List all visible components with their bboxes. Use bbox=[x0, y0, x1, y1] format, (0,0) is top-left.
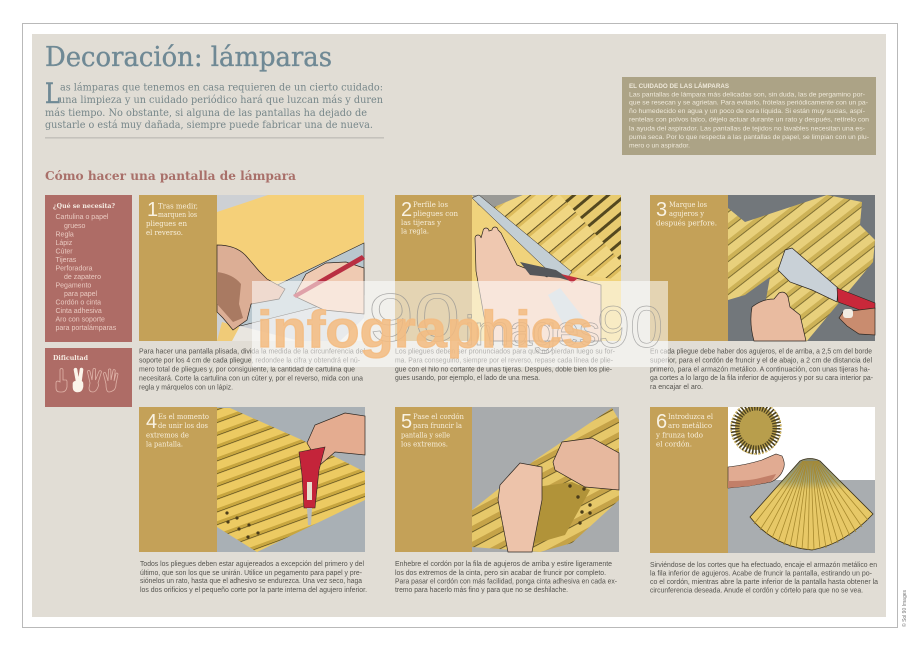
step 6 label panel: aro metálico bbox=[668, 421, 713, 430]
step 1 text: mero total de pliegues y, por consiguiente, la cantidad de cartulina que bbox=[139, 366, 355, 374]
callout: care of lamps: que se resecan y se agrietan. Para evitarlo, frótelas periódicamente con un pa- bbox=[629, 100, 868, 107]
step 6 text: la fila inferior de agujeros. Acabe de fruncir la pantalla, estirando un po- bbox=[650, 570, 873, 578]
step 4 label panel: Es el momento bbox=[158, 412, 209, 421]
section heading: Cómo hacer una pantalla de lámpara bbox=[45, 168, 296, 183]
step 4 bbox=[139, 407, 367, 594]
icon: four finger hand bbox=[103, 369, 118, 392]
panel: materials: Tijeras bbox=[56, 257, 77, 264]
step 1 text: Para hacer una pantalla plisada, divida la medida de la circunferencia del bbox=[139, 348, 365, 356]
step 2 text: ma. Para conseguirlo, siempre por el reverso, repase cada línea de plie- bbox=[395, 358, 614, 364]
step 1 label panel bbox=[139, 195, 217, 341]
title: Decoración: lámparas bbox=[45, 42, 332, 73]
step 2 bbox=[395, 195, 621, 382]
step 5 text: Enhebre el cordón por la fila de agujeros de arriba y estire ligeramente bbox=[395, 561, 612, 568]
step 3 label panel bbox=[650, 195, 728, 341]
panel: materials: Aro con soporte bbox=[56, 316, 105, 324]
step 1 text bbox=[139, 348, 365, 392]
step 2 label panel bbox=[395, 195, 472, 341]
illustration: punching holes bbox=[728, 195, 875, 341]
intro text block: as lámparas que tenemos en casa requieren de un cierto cuidado: bbox=[60, 82, 383, 94]
step 6 label panel: 6 bbox=[656, 411, 667, 433]
step 1 label panel: pliegues en bbox=[146, 219, 187, 228]
step 3 text: En cada pliegue debe haber dos agujeros, el de arriba, a 2,5 cm del borde bbox=[650, 348, 872, 356]
panel: materials: de zapatero bbox=[64, 274, 101, 281]
panel: materials: Pegamento bbox=[56, 282, 91, 289]
step 6 text: Sirviéndose de los cortes que ha efectuado, encaje el armazón metálico en bbox=[650, 562, 877, 569]
step 6 text: circunferencia deseada. Anude el cordón y córtelo para que no se vea. bbox=[650, 588, 863, 594]
step 5 text: tremo para hacerlo más fino y para que no se deshilache. bbox=[395, 587, 568, 594]
step 2 label panel: pliegues con bbox=[413, 209, 458, 218]
step 6 text bbox=[650, 562, 878, 594]
step 4 text: los dos orificios y el pequeño corte por la parte interna del agujero inferior. bbox=[140, 587, 367, 594]
step 3 label panel: 3 bbox=[656, 199, 667, 221]
panel: materials: Lápiz bbox=[56, 240, 73, 247]
step 4 label panel bbox=[139, 407, 217, 552]
step 3 text: ra encajar el aro. bbox=[650, 384, 703, 391]
step 5 label panel bbox=[395, 407, 472, 552]
step 1 text: necesitará. Corte la cartulina con un cúter y, por el reverso, mida con una bbox=[139, 376, 363, 382]
step 2 text: gues usando, por ejemplo, el lado de una mesa. bbox=[395, 375, 540, 382]
step 3 text: ga cortes a lo largo de la fila inferior de agujeros y por su cara interior pa- bbox=[650, 375, 874, 382]
step 1 text: regla y márquelos con un lápiz. bbox=[139, 384, 233, 392]
watermark: images bbox=[465, 307, 600, 354]
step 5 label panel: Pase el cordón bbox=[413, 412, 464, 421]
step 2 text bbox=[395, 348, 616, 382]
step 2 label panel: las tijeras y bbox=[401, 218, 442, 227]
illustration: creasing folds with scissors bbox=[472, 195, 621, 341]
step 5 bbox=[395, 407, 619, 594]
step 6 text: co el cordón, mientras abre la parte inferior de la pantalla hasta obtener la bbox=[650, 579, 878, 586]
step 4 text: último, que son los que se unirán. Utilice un pegamento para papel y pre- bbox=[140, 570, 363, 577]
icon: one finger hand bbox=[56, 369, 67, 392]
callout: care of lamps bbox=[622, 77, 876, 155]
callout: care of lamps: la ayuda del aspirador. Las pantallas de tejidos no lavables necesitan una es- bbox=[629, 125, 865, 132]
panel: materials: Regla bbox=[56, 232, 74, 238]
step 6 label panel: y frunza todo bbox=[655, 430, 704, 440]
step 5 text bbox=[395, 561, 618, 594]
panel: materials bbox=[45, 195, 132, 342]
step 4 label panel: 4 bbox=[146, 411, 157, 433]
callout: care of lamps: ño humedecido en agua y un poco de cera líquida. Si están muy sucias, aspí- bbox=[629, 108, 865, 115]
watermark: infographics bbox=[257, 301, 593, 359]
step 3 text: superior, para el cordón de fruncir y el de abajo, a 2 cm de distancia del bbox=[650, 358, 872, 364]
step 3 text bbox=[650, 348, 874, 391]
icon: two finger hand bbox=[73, 368, 83, 392]
step 4 label panel: de unir los dos bbox=[158, 421, 208, 430]
panel: materials: para portalámparas bbox=[56, 325, 117, 332]
panel: materials: Cordón o cinta bbox=[56, 300, 101, 306]
step 4 text: Todos los pliegues deben estar agujereados a excepción del primero y del bbox=[140, 561, 364, 568]
illustration: finished lampshade bbox=[728, 402, 875, 553]
step 1 label panel: marquen los bbox=[158, 210, 197, 219]
intro text block: más tiempo. No obstante, si alguna de las pantallas ha dejado de bbox=[45, 107, 367, 119]
panel: difficulty: Dificultad bbox=[53, 354, 88, 362]
step 2 label panel: 2 bbox=[401, 199, 412, 221]
step 3 text: primero, para el armazón metálico. A continuación, con unas tijeras ha- bbox=[650, 366, 871, 374]
panel: materials: Perforadora bbox=[56, 265, 93, 272]
panel: difficulty bbox=[45, 348, 132, 407]
step 1 label panel: el reverso. bbox=[146, 228, 183, 237]
panel: materials: grueso bbox=[64, 223, 86, 230]
step 5 label panel: para fruncir la bbox=[413, 421, 463, 430]
callout: care of lamps: mero o un aspirador. bbox=[629, 143, 690, 150]
step 4 text bbox=[140, 561, 367, 594]
panel: materials: Cinta adhesiva bbox=[56, 308, 102, 315]
step 4 text: siónelos un rato, hasta que el adhesivo se endurezca. Una vez seco, haga bbox=[140, 578, 362, 585]
watermark bbox=[252, 280, 668, 367]
intro text block bbox=[45, 77, 383, 131]
step 6 label panel bbox=[650, 407, 728, 553]
callout: care of lamps: rentelas con polvos talco, déjelo actuar durante un rato y después, retírelo con bbox=[629, 116, 869, 123]
step 1 label panel: 1 bbox=[147, 199, 158, 221]
step 3 label panel: Marque los bbox=[669, 200, 707, 209]
copyright: © Sol 90 Images bbox=[901, 590, 908, 627]
step 3 label panel: después perfore. bbox=[656, 218, 717, 228]
intro text block: una limpieza y un cuidado periódico hará que luzcan más y duren bbox=[59, 94, 383, 106]
step 6 bbox=[650, 402, 878, 594]
step 2 text: Los pliegues deben ser pronunciados para que no pierdan luego su for- bbox=[395, 348, 616, 356]
illustration: threading the cord bbox=[472, 407, 619, 552]
step 4 label panel: extremos de bbox=[146, 430, 189, 440]
intro text block: gustarle o está muy dañada, siempre puede fabricar una de nueva. bbox=[45, 119, 373, 131]
callout: care of lamps: EL CUIDADO DE LAS LÁMPARAS bbox=[629, 81, 730, 90]
step 1 text: soporte por los 4 cm de cada pliegue, redondee la cifra y obtendrá el nú- bbox=[139, 358, 361, 364]
watermark: 90 bbox=[597, 295, 663, 360]
icon: three finger hand bbox=[87, 368, 101, 392]
panel: materials: ¿Qué se necesita? bbox=[53, 202, 115, 210]
drop cap: L bbox=[45, 77, 60, 110]
step 5 label panel: los extremos. bbox=[401, 440, 448, 448]
step 6 label panel: Introduzca el bbox=[668, 412, 714, 421]
panel: materials: para papel bbox=[64, 291, 98, 298]
step 4 label panel: la pantalla. bbox=[146, 440, 183, 448]
step 5 label panel: pantalla y selle bbox=[401, 430, 450, 440]
step 1 bbox=[139, 195, 365, 392]
panel: materials: Cartulina o papel bbox=[56, 214, 109, 221]
watermark: 90 bbox=[368, 280, 460, 356]
illustration: marking with ruler and pencil bbox=[217, 195, 365, 341]
step 2 text: gue con el hilo no cortante de unas tijeras. Después, doble bien los plie- bbox=[395, 366, 613, 374]
step 2 label panel: la regla. bbox=[401, 226, 429, 236]
step 3 bbox=[650, 195, 875, 391]
illustration: gluing with red tube bbox=[217, 407, 365, 552]
callout: care of lamps: Las pantallas de lámpara más delicadas son, sin duda, las de pergamino por- bbox=[629, 91, 865, 98]
step 3 label panel: agujeros y bbox=[669, 209, 705, 218]
step 6 label panel: el cordón. bbox=[656, 440, 692, 448]
step 5 text: los dos extremos de la cinta, pero sin acabar de fruncir por completo. bbox=[395, 570, 606, 577]
callout: care of lamps: puma seca. Por lo que respecta a las pantallas de papel, se limpian con un plu- bbox=[629, 134, 869, 141]
panel: materials: Cúter bbox=[56, 248, 73, 256]
step 5 text: Para pasar el cordón con más facilidad, ponga cinta adhesiva en cada ex- bbox=[395, 578, 618, 586]
step 1 label panel: Tras medir, bbox=[158, 202, 198, 210]
step 5 label panel: 5 bbox=[401, 411, 412, 433]
step 2 label panel: Perfile los bbox=[413, 200, 448, 209]
